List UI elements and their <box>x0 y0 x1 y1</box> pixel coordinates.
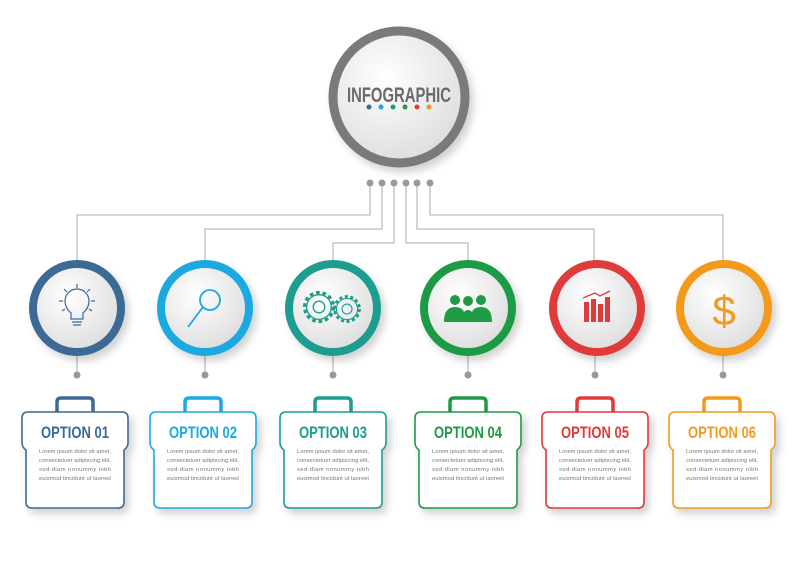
box: option 03: consectetuer adipiscing elit, <box>297 458 369 464</box>
icon circle 02: magnifier <box>161 264 249 352</box>
box: option 02: OPTION 02 <box>169 423 237 442</box>
box: option 05: euismod tincidunt ut laoreet <box>559 476 631 482</box>
box: option 05: consectetuer adipiscing elit, <box>559 458 631 464</box>
box: option 02: sed diam nonummy nibh <box>167 467 239 473</box>
box: option 03: sed diam nonummy nibh <box>297 467 369 473</box>
box: option 05 <box>542 398 648 508</box>
box: option 01: euismod tincidunt ut laoreet <box>39 476 111 482</box>
box: option 03: Lorem ipsum dolor sit amet, <box>297 449 369 455</box>
box: option 04: consectetuer adipiscing elit, <box>432 458 504 464</box>
box: option 02: Lorem ipsum dolor sit amet, <box>167 449 239 455</box>
box: option 02: euismod tincidunt ut laoreet <box>167 476 239 482</box>
box: option 02 <box>150 398 256 508</box>
box: option 01 <box>22 398 128 508</box>
connector lines <box>77 183 723 375</box>
box: option 05: Lorem ipsum dolor sit amet, <box>559 449 631 455</box>
box: option 01: Lorem ipsum dolor sit amet, <box>39 449 111 455</box>
central circle: INFOGRAPHIC <box>333 31 465 163</box>
icon circle 05: bar chart <box>553 264 641 352</box>
box: option 06: OPTION 06 <box>688 423 756 442</box>
box: option 06: Lorem ipsum dolor sit amet, <box>686 449 758 455</box>
box: option 06: euismod tincidunt ut laoreet <box>686 476 758 482</box>
box: option 04: sed diam nonummy nibh <box>432 467 504 473</box>
icon circle 06: dollar: $ <box>712 287 736 334</box>
box: option 01: OPTION 01 <box>41 423 109 442</box>
central circle: INFOGRAPHIC: INFOGRAPHIC <box>347 84 451 107</box>
icon circle 06: dollar <box>680 264 768 352</box>
box: option 04 <box>415 398 521 508</box>
box: option 01: sed diam nonummy nibh <box>39 467 111 473</box>
box: option 01: consectetuer adipiscing elit, <box>39 458 111 464</box>
icon circle 03: gears <box>289 264 377 352</box>
box: option 02: consectetuer adipiscing elit, <box>167 458 239 464</box>
box: option 06 <box>669 398 775 508</box>
box: option 03 <box>280 398 386 508</box>
icon circle 01: light bulb <box>33 264 121 352</box>
box: option 03: OPTION 03 <box>299 423 367 442</box>
box: option 06: consectetuer adipiscing elit, <box>686 458 758 464</box>
box: option 06: sed diam nonummy nibh <box>686 467 758 473</box>
box: option 04: Lorem ipsum dolor sit amet, <box>432 449 504 455</box>
box: option 05: OPTION 05 <box>561 423 629 442</box>
connector dots <box>74 180 726 378</box>
box: option 04: OPTION 04 <box>434 423 502 442</box>
icon circle 04: team <box>424 264 512 352</box>
box: option 03: euismod tincidunt ut laoreet <box>297 476 369 482</box>
box: option 05: sed diam nonummy nibh <box>559 467 631 473</box>
box: option 04: euismod tincidunt ut laoreet <box>432 476 504 482</box>
